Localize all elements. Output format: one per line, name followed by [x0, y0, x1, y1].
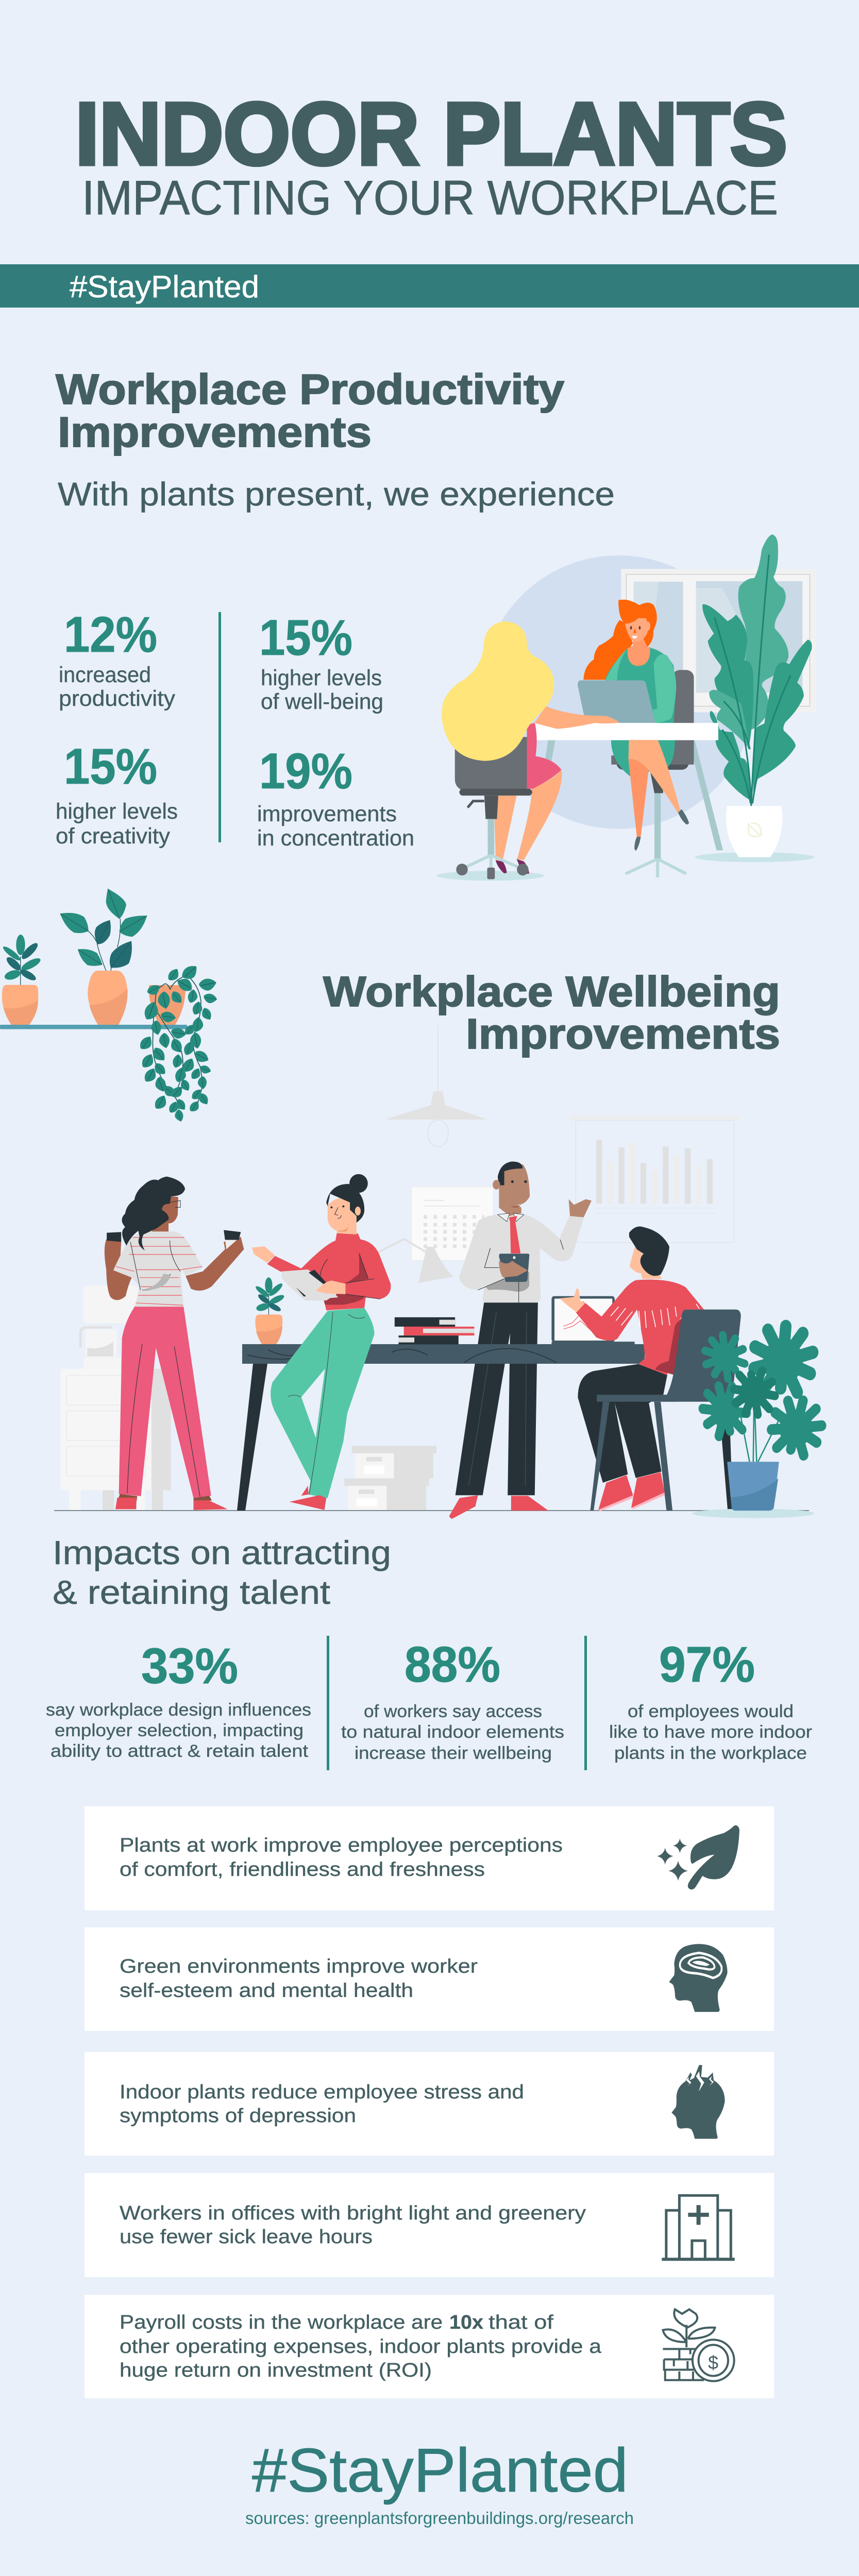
card: perceptions of comfort: Plants at work improve employee perceptions — [120, 1835, 563, 1856]
stat: 19% concentration: improvements — [257, 802, 397, 826]
subheading: With plants present, we experience — [58, 476, 615, 513]
stat: 88% — [341, 1636, 564, 1763]
title: INDOOR PLANTS — [75, 84, 787, 183]
card: payroll return on investment: that of — [489, 2312, 554, 2333]
illustration: two women at a desk with plant — [437, 534, 816, 880]
heading: workplace productivity improvements — [56, 365, 564, 456]
card: stress and depression: Indoor plants reduce employee stress and — [120, 2081, 524, 2103]
card: payroll return on investment: other operating expenses, indoor plants provide a — [120, 2336, 602, 2358]
stat: 88%: of workers say access — [364, 1702, 542, 1721]
card: perceptions of comfort — [85, 1806, 774, 1910]
heading: workplace productivity improvements: Workplace Productivity — [56, 365, 564, 413]
storage boxes — [344, 1446, 436, 1511]
stat: 19% concentration: 19% — [259, 743, 352, 799]
stat: 19% concentration — [257, 743, 414, 851]
stat: 12% productivity — [59, 606, 176, 711]
stat: 97%: like to have more indoor — [609, 1722, 812, 1742]
stat: 15% well-being: 15% — [259, 609, 352, 666]
heading: workplace wellbeing improvements — [323, 968, 780, 1058]
hashtag banner: #StayPlanted — [70, 269, 259, 304]
card: self-esteem and mental health: Green environments improve worker — [120, 1956, 478, 1977]
icon: head with brain — [669, 1944, 728, 2012]
stat: 19% concentration: in concentration — [257, 826, 414, 851]
heading: workplace productivity improvements: Improvements — [58, 408, 372, 456]
sources: sources: greenplantsforgreenbuildings.org/research — [245, 2509, 634, 2528]
shelf pot middle with plant — [60, 889, 147, 1025]
illustration: office background furniture — [61, 1025, 739, 1511]
stat: 15% creativity: of creativity — [56, 824, 170, 849]
person: seated man with laptop — [551, 1227, 741, 1511]
closing hashtag: #StayPlanted — [252, 2436, 628, 2505]
divider — [327, 1636, 329, 1770]
heading: workplace wellbeing improvements: Improvements — [466, 1010, 780, 1058]
floor line — [54, 1510, 809, 1511]
stat: 15% creativity: higher levels — [56, 799, 178, 824]
divider — [218, 612, 221, 842]
stat: 97%: of employees would — [628, 1702, 794, 1721]
stat: 12% productivity: 12% — [64, 606, 157, 663]
stat: 33% — [46, 1638, 311, 1761]
stat: 97%: 97% — [659, 1636, 755, 1692]
card: payroll return on investment — [85, 2295, 774, 2398]
card: fewer sick leave hours: use fewer sick leave hours — [120, 2226, 373, 2248]
card: perceptions of comfort: of comfort, friendliness and freshness — [120, 1859, 485, 1880]
stat: 12% productivity: increased — [59, 663, 151, 687]
small desk plant — [254, 1277, 285, 1344]
illustration: plants on a shelf — [0, 889, 218, 1123]
icon: hospital building — [662, 2195, 735, 2259]
person: woman with curly hair and coffee cups — [105, 1177, 244, 1510]
shelf — [0, 1025, 187, 1029]
stat: 15% well-being: of well-being — [261, 689, 383, 714]
book stack — [395, 1317, 474, 1344]
whiteboard with bar chart — [571, 1116, 739, 1243]
stat: 33%: ability to attract & retain talent — [50, 1741, 309, 1761]
title: IMPACTING YOUR WORKPLACE — [82, 171, 778, 225]
heading: impacts on attracting and retaining talent — [53, 1534, 391, 1611]
card: payroll return on investment: huge return on investment (ROI) — [120, 2360, 432, 2381]
heading: impacts on attracting and retaining talent: & retaining talent — [53, 1573, 330, 1611]
card: stress and depression — [85, 2052, 774, 2156]
card: stress and depression: symptoms of depression — [120, 2105, 356, 2127]
shelf pot left — [2, 985, 38, 1025]
stat: 15% well-being: higher levels — [261, 666, 382, 690]
stat: 97%: plants in the workplace — [614, 1743, 807, 1763]
card: payroll return on investment: Payroll costs in the workplace are — [120, 2312, 443, 2333]
wall calendar — [412, 1187, 493, 1260]
stat: 15% creativity: 15% — [64, 738, 157, 794]
stat: 15% well-being — [259, 609, 383, 714]
divider — [584, 1636, 587, 1770]
stat: 88%: increase their wellbeing — [355, 1743, 552, 1763]
stat: 33%: 33% — [141, 1638, 238, 1694]
filing cabinet and water cooler — [61, 1285, 171, 1511]
card: fewer sick leave hours — [85, 2173, 774, 2277]
card: self-esteem and mental health — [85, 1927, 774, 2031]
stat: 97% — [609, 1636, 812, 1763]
desk lamp shade — [418, 1247, 453, 1283]
stat: 33%: say workplace design influences — [46, 1700, 311, 1720]
person: woman with hair bun and notepad — [252, 1174, 391, 1510]
stat: 88%: to natural indoor elements — [341, 1722, 564, 1742]
monstera plant in blue pot — [692, 1324, 826, 1518]
small leaf plant — [2, 935, 42, 985]
icon: leaf with sparkles — [657, 1825, 739, 1890]
person: man standing with tablet — [449, 1161, 592, 1519]
stat: 88%: 88% — [405, 1636, 500, 1692]
icon: plant growing from bricks with coin — [663, 2309, 734, 2381]
hanging vine — [138, 962, 218, 1123]
card: payroll return on investment: 10x — [449, 2312, 483, 2333]
title — [75, 84, 787, 225]
stat: 12% productivity: productivity — [59, 686, 176, 711]
card: self-esteem and mental health: self-esteem and mental health — [120, 1980, 413, 2002]
panel: productivity statistics — [56, 606, 414, 851]
ceiling lamp — [385, 1025, 487, 1147]
icon: stressed head — [671, 2065, 725, 2139]
desk lamp — [369, 1239, 428, 1257]
heading: workplace wellbeing improvements: Workplace Wellbeing — [323, 968, 780, 1015]
shelf pot right — [149, 985, 186, 1025]
panel: talent statistics — [46, 1636, 812, 1770]
stat: 33%: employer selection, impacting — [55, 1721, 304, 1740]
hashtag banner — [0, 264, 859, 308]
heading: impacts on attracting and retaining talent: Impacts on attracting — [53, 1534, 391, 1571]
stat: 15% creativity — [56, 738, 178, 849]
card: fewer sick leave hours: Workers in offices with bright light and greenery — [120, 2202, 586, 2224]
office table — [237, 1344, 733, 1511]
icon: dollar sign on coin: $ — [708, 2352, 718, 2373]
